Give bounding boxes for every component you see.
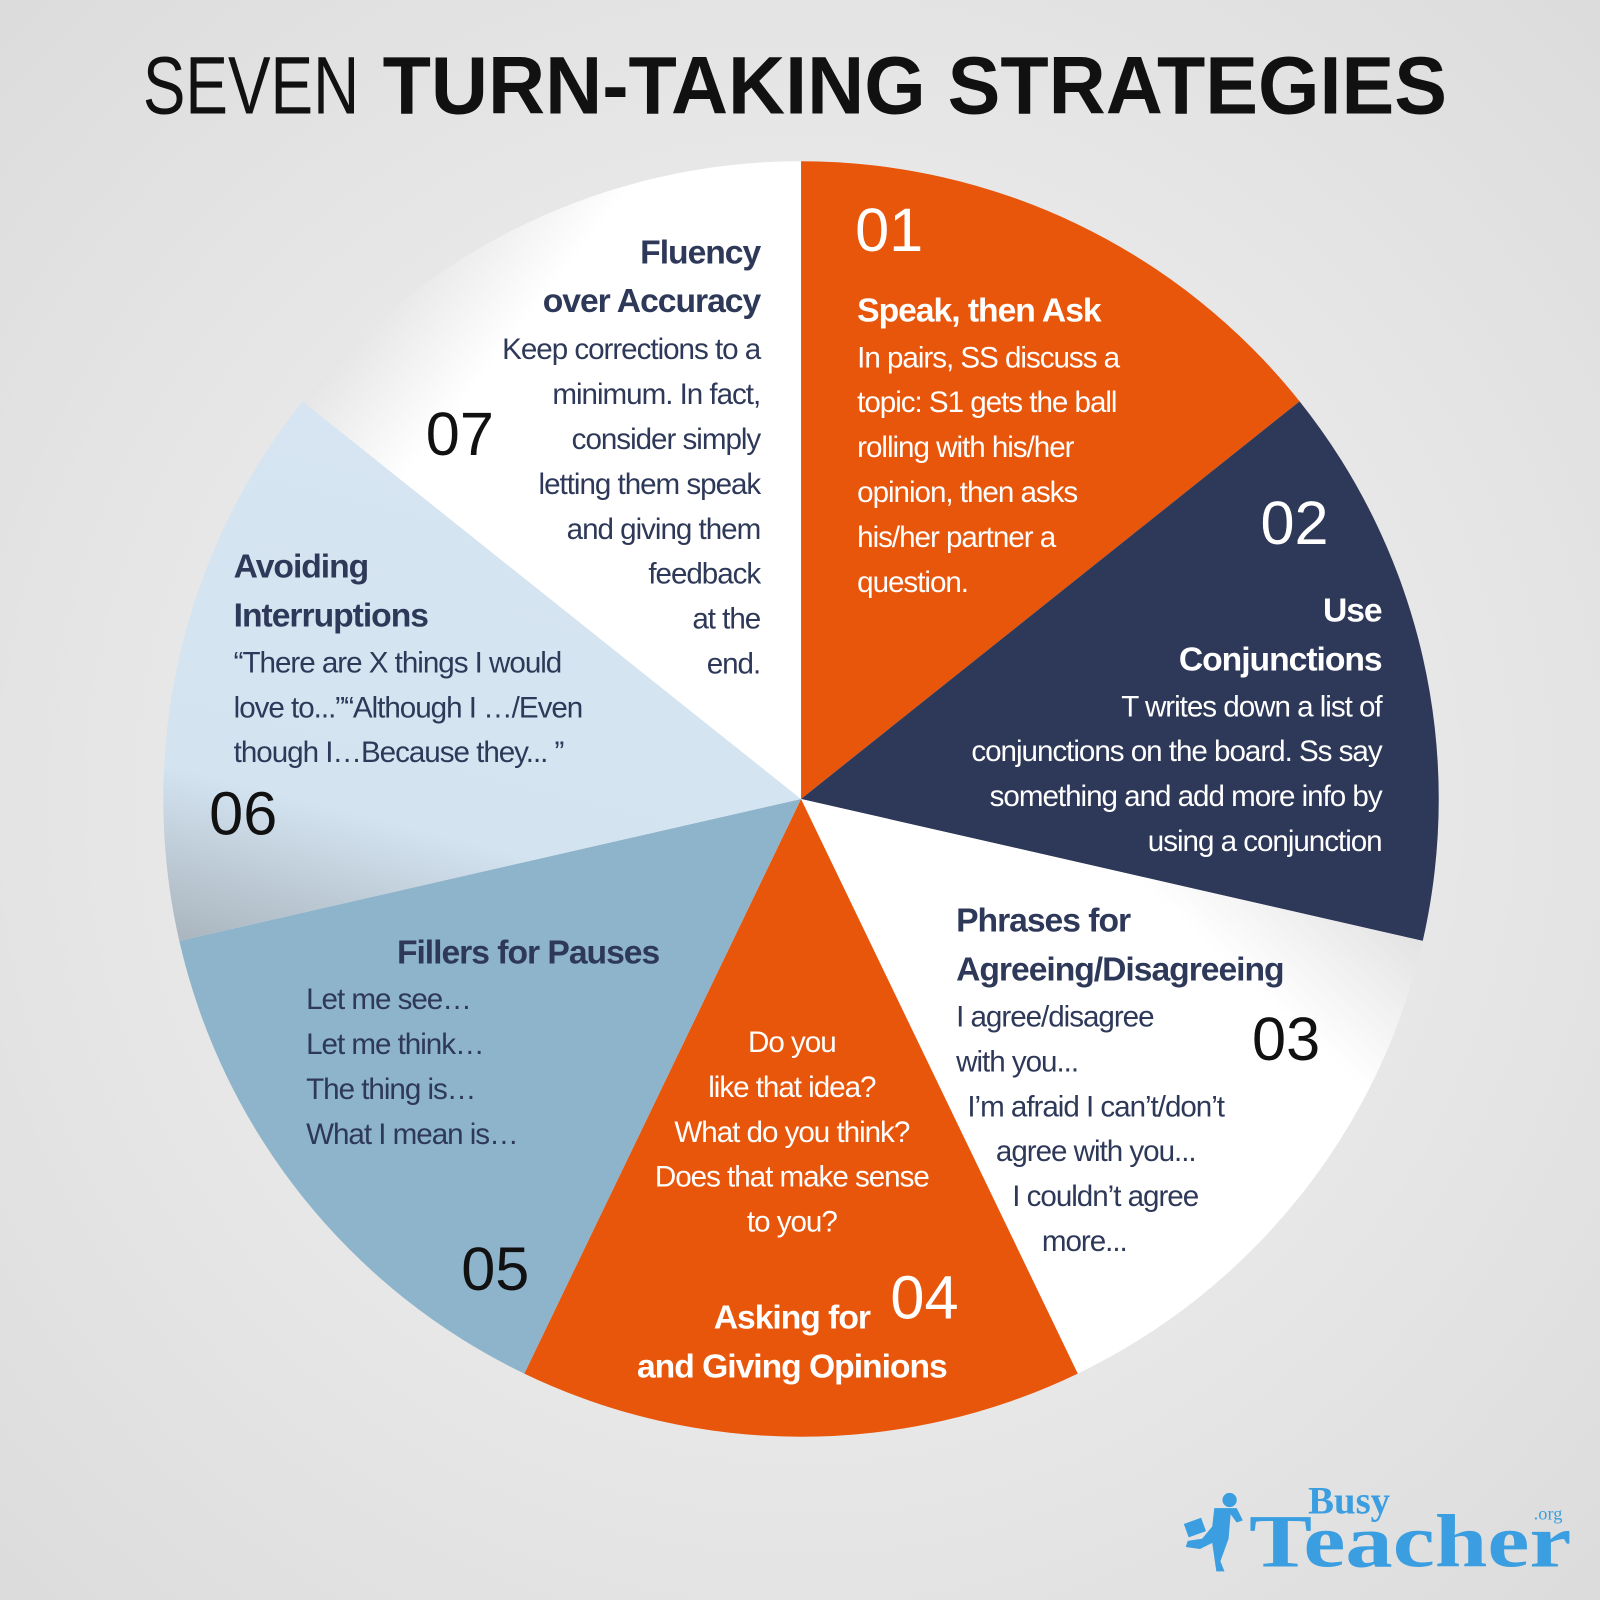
panel 07 text: consider simply bbox=[572, 423, 761, 456]
panel 03 text: I’m afraid I can’t/don’t bbox=[967, 1090, 1225, 1123]
panel 05 text: Fillers for Pauses bbox=[397, 934, 659, 971]
panel 07 text: feedback bbox=[648, 558, 761, 591]
panel 07 text: 07 bbox=[426, 400, 494, 468]
panel 02 text: using a conjunction bbox=[1148, 825, 1382, 858]
panel 07 text: end. bbox=[707, 647, 760, 680]
panel 04 text: Does that make sense bbox=[655, 1161, 929, 1194]
panel 01 text: topic: S1 gets the ball bbox=[857, 386, 1116, 419]
panel 04 text: and Giving Opinions bbox=[637, 1349, 947, 1386]
panel 05 text: Let me see… bbox=[306, 983, 471, 1016]
panel 03 text: 03 bbox=[1252, 1005, 1320, 1073]
panel 06 text: 06 bbox=[209, 780, 277, 848]
panel 03 text: I agree/disagree bbox=[956, 1001, 1154, 1034]
panel 01 text bbox=[855, 196, 1121, 599]
panel 03 text: Agreeing/Disagreeing bbox=[956, 952, 1284, 989]
slice 05 bbox=[179, 799, 801, 1374]
pie chart bbox=[163, 161, 1439, 1437]
panel 02 text bbox=[971, 489, 1383, 858]
panel 06 text: “There are X things I would bbox=[234, 646, 561, 679]
panel 04 text: to you? bbox=[747, 1206, 837, 1239]
panel 03 text: Phrases for bbox=[956, 903, 1131, 940]
panel 07 text bbox=[426, 234, 762, 680]
panel 01 text: Speak, then Ask bbox=[857, 292, 1102, 329]
panel 01 text: In pairs, SS discuss a bbox=[857, 341, 1121, 374]
panel 06 text: Avoiding bbox=[234, 549, 368, 586]
panel 02 text: Use bbox=[1323, 592, 1382, 629]
panel 06 text bbox=[209, 549, 582, 848]
panel 07 text: minimum. In fact, bbox=[552, 378, 760, 411]
panel 07 text: and giving them bbox=[567, 513, 760, 546]
panel 05 text: Let me think… bbox=[306, 1028, 484, 1061]
panel 04 text: Do you bbox=[748, 1026, 836, 1059]
panel 05 text: 05 bbox=[461, 1235, 529, 1303]
panel 04 text: like that idea? bbox=[708, 1071, 876, 1104]
panel 06 text: Interruptions bbox=[234, 598, 428, 635]
panel 07 text: over Accuracy bbox=[543, 283, 762, 320]
panel 06 text: love to...”“Although I …/Even bbox=[234, 691, 582, 724]
panel 01 text: rolling with his/her bbox=[857, 431, 1075, 464]
logo bbox=[1184, 1479, 1571, 1583]
panel 02 text: something and add more info by bbox=[990, 780, 1383, 813]
panel 06 text: though I…Because they... ” bbox=[234, 736, 564, 769]
title: TURN-TAKING STRATEGIES bbox=[383, 40, 1447, 131]
panel 03 text: with you... bbox=[955, 1045, 1078, 1078]
panel 01 text: opinion, then asks bbox=[857, 476, 1077, 509]
panel 01 text: his/her partner a bbox=[857, 521, 1057, 554]
panel 07 text: letting them speak bbox=[539, 468, 761, 501]
panel 03 text: agree with you... bbox=[996, 1135, 1196, 1168]
panel 05 text: The thing is… bbox=[306, 1073, 475, 1106]
icon: running teacher bbox=[1184, 1493, 1243, 1571]
panel 07 text: at the bbox=[692, 603, 761, 636]
slice 03 bbox=[801, 799, 1423, 1374]
panel 03 text: more... bbox=[1042, 1225, 1127, 1258]
panel 04 text: What do you think? bbox=[674, 1116, 910, 1149]
panel 02 text: T writes down a list of bbox=[1121, 690, 1383, 723]
panel 04 text: Asking for bbox=[714, 1300, 871, 1337]
logo: Teacher bbox=[1249, 1500, 1571, 1583]
panel 02 text: conjunctions on the board. Ss say bbox=[971, 735, 1383, 768]
panel 07 text: Fluency bbox=[640, 234, 761, 271]
logo: .org bbox=[1534, 1503, 1562, 1523]
panel 01 text: question. bbox=[857, 566, 968, 599]
slice 01 bbox=[801, 161, 1300, 799]
panel 03 text: I couldn’t agree bbox=[1012, 1180, 1199, 1213]
panel 02 text: 02 bbox=[1260, 489, 1329, 557]
panel 04 text bbox=[637, 1026, 959, 1386]
panel 03 text bbox=[955, 903, 1320, 1258]
slice 07 bbox=[302, 161, 801, 799]
panel 02 text: Conjunctions bbox=[1179, 641, 1382, 678]
panel 05 text: What I mean is… bbox=[306, 1118, 518, 1151]
panel 04 text: 04 bbox=[890, 1263, 959, 1331]
panel 05 text bbox=[306, 934, 659, 1303]
panel 01 text: 01 bbox=[855, 196, 923, 264]
panel 07 text: Keep corrections to a bbox=[502, 333, 762, 366]
slice 06 bbox=[163, 401, 801, 941]
title: SEVEN bbox=[143, 40, 359, 131]
slice 04 bbox=[524, 799, 1078, 1437]
slice 02 bbox=[801, 401, 1439, 941]
logo: Busy bbox=[1308, 1479, 1390, 1522]
